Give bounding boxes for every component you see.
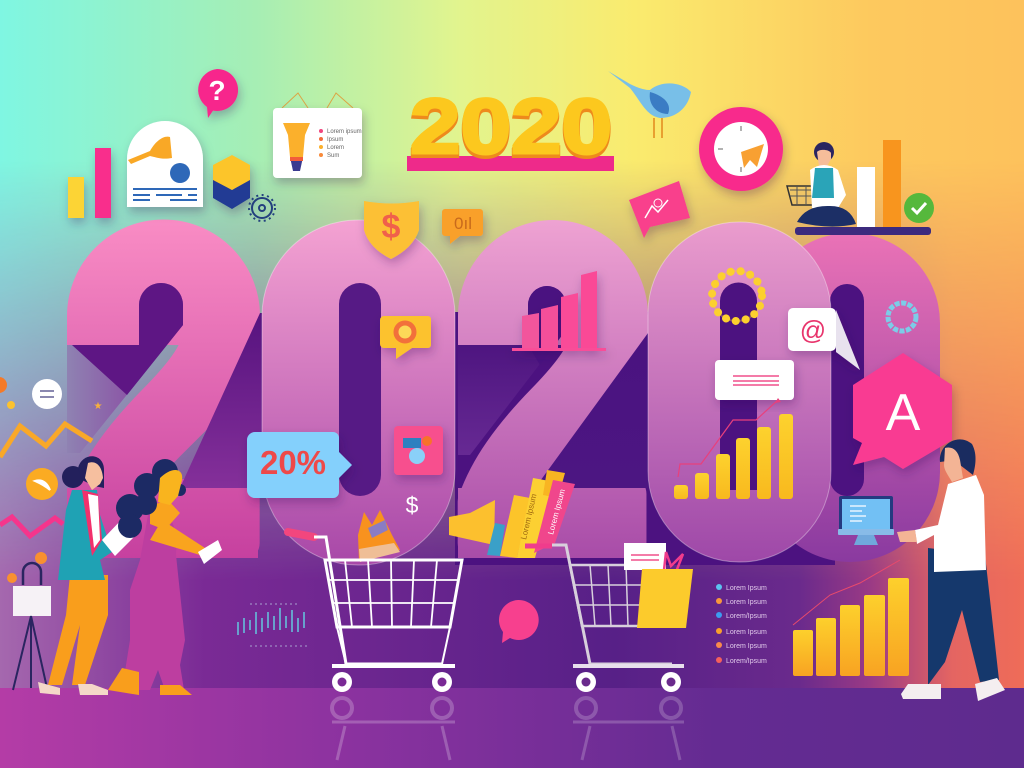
shelf with seated woman, bars and check xyxy=(787,140,934,235)
shopping cart two with bag xyxy=(525,543,693,692)
mini bars top left xyxy=(68,148,111,218)
digit 0 front: 0 xyxy=(637,128,841,653)
cart one reflection xyxy=(332,698,455,760)
pink bar chart xyxy=(512,271,606,351)
orange chat bubble xyxy=(442,209,483,244)
legend list xyxy=(716,584,767,665)
20 percent callout: 20% xyxy=(260,444,326,481)
monitor xyxy=(838,496,894,545)
comment box xyxy=(715,360,794,400)
equals circle xyxy=(32,379,62,409)
pencil pouch illustration xyxy=(358,510,400,562)
shopping cart one xyxy=(288,532,462,692)
icon: gear xyxy=(249,195,275,221)
cart two reflection xyxy=(573,698,684,760)
stacked books: Lorem Ipsum xyxy=(546,488,567,536)
hanging card: Ipsum xyxy=(327,137,343,143)
legend list: Lorem Ipsum xyxy=(726,585,767,592)
title 2020: 2020 xyxy=(410,85,612,173)
notebook xyxy=(102,517,138,556)
legend list: Lorem/Ipsum xyxy=(726,613,767,620)
icon: shield with dollar: $ xyxy=(382,208,401,246)
hexagon A badge xyxy=(853,353,952,469)
blue dotted ring xyxy=(888,303,916,331)
digit 0 first: 0 xyxy=(253,129,463,653)
tripod with box xyxy=(13,563,51,690)
left decorations: ★ xyxy=(94,401,103,412)
pink app tile xyxy=(394,426,443,475)
man with white shirt xyxy=(897,439,1005,701)
legend list: Lorem/Ipsum xyxy=(726,658,767,665)
legend list: Lorem Ipsum xyxy=(726,629,767,636)
white note card xyxy=(624,543,666,570)
hanging card xyxy=(273,93,362,178)
digit 2 middle: 2 xyxy=(458,150,648,635)
woman with curly hair xyxy=(108,459,222,695)
icon: question bubble: ? xyxy=(208,75,226,106)
hanging card: Lorem ipsum xyxy=(327,129,362,135)
icon: clock xyxy=(699,107,783,191)
seated woman xyxy=(787,142,856,227)
yellow bag xyxy=(637,552,693,628)
hexagon A badge: A xyxy=(886,384,921,442)
dark shadow behind big digits xyxy=(455,312,835,565)
hanging card: Sum xyxy=(327,153,339,159)
title 2020: 2020 xyxy=(410,82,612,170)
at-sign card: @ xyxy=(800,315,826,345)
icon: cube xyxy=(213,155,250,209)
icon: bird xyxy=(608,71,691,138)
at-sign card xyxy=(788,308,860,370)
digit 0 back right xyxy=(760,233,940,562)
lower right yellow bars xyxy=(793,560,909,676)
pink speech bubble xyxy=(499,600,539,643)
orange chat bubble: 0ıl xyxy=(454,214,472,233)
icon: shield with dollar xyxy=(364,201,419,259)
20 percent callout xyxy=(247,432,352,498)
arch card with brush and globe xyxy=(127,121,203,207)
big digits 2020 xyxy=(67,128,940,653)
pink tag with line xyxy=(629,181,690,238)
icon: question bubble xyxy=(198,69,238,118)
yellow paper fan xyxy=(449,500,495,545)
woman with teal jacket xyxy=(38,456,138,695)
legend list: Lorem Ipsum xyxy=(726,643,767,650)
dollar sign: $ xyxy=(406,492,419,518)
hanging card: Lorem xyxy=(327,145,344,151)
digit 2 left: 2 xyxy=(68,151,262,636)
camera bubble xyxy=(380,316,431,359)
left decorations xyxy=(0,377,103,583)
yellow dotted ring xyxy=(712,271,762,321)
small tick chart xyxy=(238,604,308,646)
yellow bar chart with trend xyxy=(674,398,793,499)
floor xyxy=(0,688,1024,768)
stacked books xyxy=(487,470,575,558)
legend list: Lorem Ipsum xyxy=(726,599,767,606)
stacked books: Lorem Ipsum xyxy=(519,493,539,540)
